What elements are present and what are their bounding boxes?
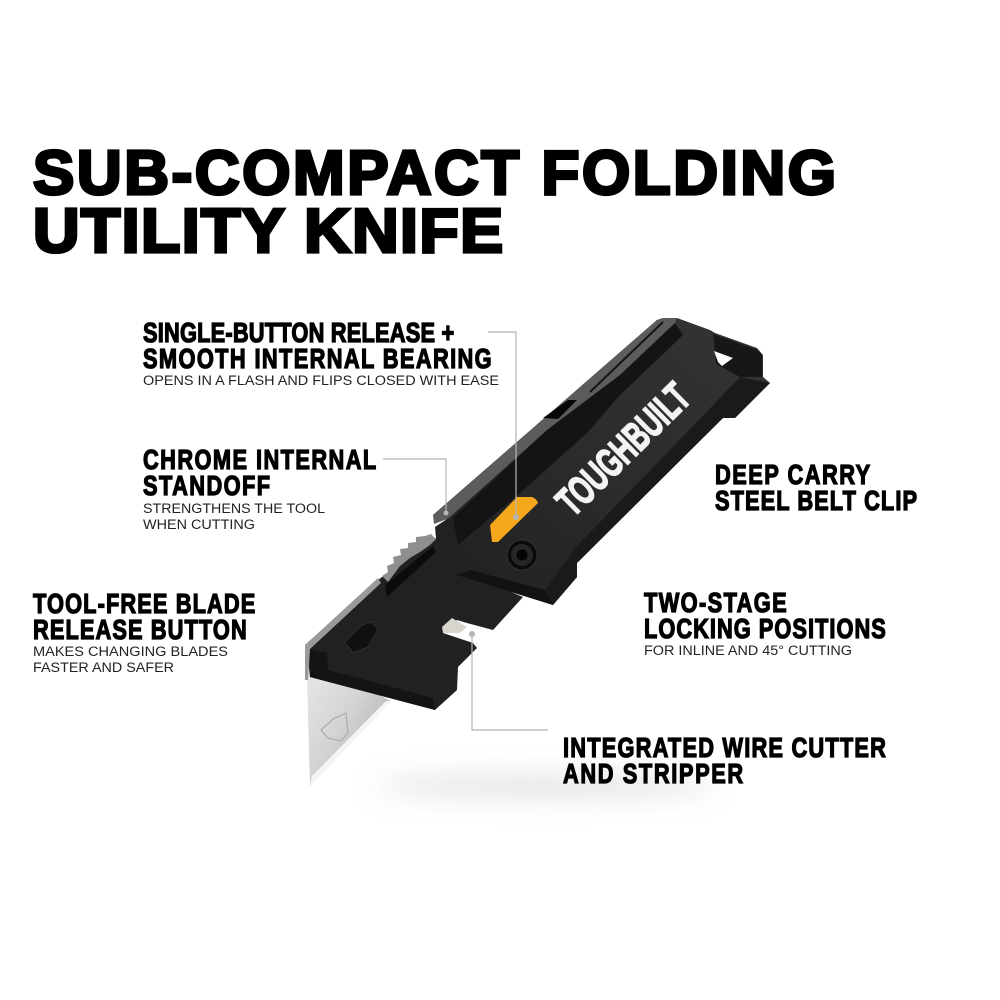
callout: blade release	[33, 588, 255, 675]
callout: single-button release: SMOOTH INTERNAL BEARING	[143, 343, 492, 375]
callout: belt clip: STEEL BELT CLIP	[715, 485, 917, 517]
callout: wire cutter: AND STRIPPER	[563, 758, 743, 790]
leader line: release button	[488, 332, 519, 520]
callout: blade release: TOOL-FREE BLADE	[33, 588, 255, 620]
grip teeth	[382, 534, 436, 582]
callout: blade release: RELEASE BUTTON	[33, 614, 247, 646]
callout: belt clip: DEEP CARRY	[715, 459, 870, 491]
illustration: folding utility knife	[305, 318, 770, 786]
title: UTILITY KNIFE	[33, 197, 503, 266]
knife shadow	[375, 775, 715, 797]
title: SUB-COMPACT FOLDING	[33, 139, 836, 208]
callout: locking positions: TWO-STAGE	[644, 587, 787, 619]
clip opening	[714, 351, 733, 366]
callout: blade release: MAKES CHANGING BLADES	[33, 644, 228, 659]
callout: chrome standoff: CHROME INTERNAL	[143, 444, 376, 476]
leader line: wire cutter	[469, 631, 548, 730]
callout: chrome standoff: STRENGTHENS THE TOOL	[143, 501, 326, 516]
title	[33, 139, 836, 266]
callout: chrome standoff	[143, 444, 376, 532]
blade	[306, 650, 391, 786]
callout: belt clip	[715, 459, 917, 517]
brand logo: TOUGHBUILT	[547, 374, 699, 524]
callout: single-button release: SINGLE-BUTTON RELEASE +	[143, 317, 454, 349]
belt slot	[543, 400, 577, 419]
leader line: chrome standoff	[383, 459, 448, 516]
handle body	[433, 318, 770, 605]
callout: chrome standoff: WHEN CUTTING	[143, 517, 255, 532]
callout: locking positions: FOR INLINE AND 45° CUTTING	[644, 643, 852, 658]
callout: blade release: FASTER AND SAFER	[33, 660, 174, 675]
release button	[490, 497, 538, 542]
callout: wire cutter	[563, 732, 886, 790]
pivot screw	[507, 540, 537, 570]
callout: locking positions	[644, 587, 886, 658]
callout: single-button release	[143, 317, 499, 388]
blade holder	[305, 517, 523, 710]
callout: wire cutter: INTEGRATED WIRE CUTTER	[563, 732, 886, 764]
callout: locking positions: LOCKING POSITIONS	[644, 613, 886, 645]
belt clip	[713, 334, 762, 377]
callout: single-button release: OPENS IN A FLASH AND FLIPS CLOSED WITH EASE	[143, 373, 499, 388]
callout: chrome standoff: STANDOFF	[143, 470, 270, 502]
